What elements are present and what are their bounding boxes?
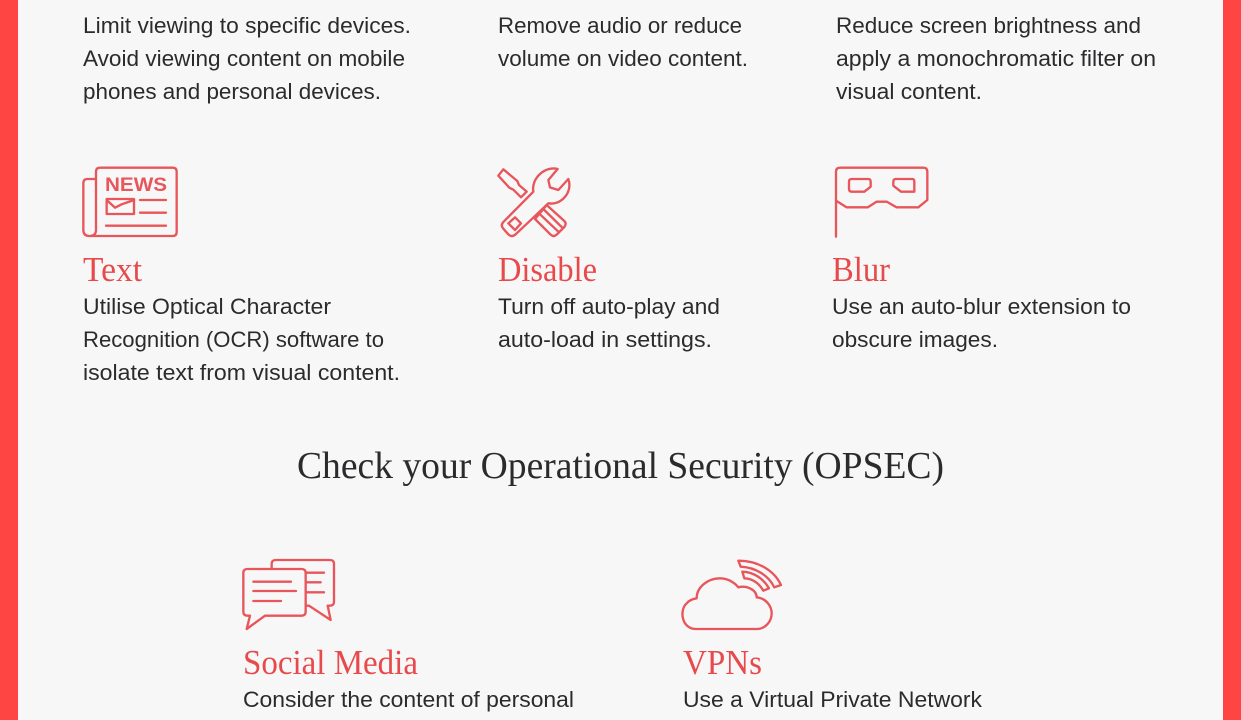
text: blur description: [832, 294, 1131, 352]
text: text description: [83, 294, 400, 385]
heading: blur: Blur: [832, 250, 890, 289]
icon: newspaper: [83, 168, 177, 236]
text: audio description: Remove audio or reduce: [498, 13, 742, 38]
panel: vpns tip: [682, 561, 983, 712]
heading: disable: Disable: [498, 250, 597, 289]
text: disable description: [498, 294, 720, 352]
text: devices description: phones and personal devices.: [83, 79, 381, 104]
panel: disable tip: [498, 168, 720, 352]
heading: vpns: VPNs: [683, 643, 762, 682]
text: visual description: Reduce screen brightness and: [836, 13, 1141, 38]
icon: newspaper: NEWS: [105, 175, 167, 196]
text: blur description: Use an auto-blur extension to: [832, 294, 1131, 319]
text: audio description: volume on video content.: [498, 46, 748, 71]
text: disable description: Turn off auto-play and: [498, 294, 720, 319]
panel: audio tip: [498, 0, 748, 71]
panel: visual tip: [836, 0, 1156, 104]
text: visual description: apply a monochromatic filter on: [836, 46, 1156, 71]
right red border: [1223, 0, 1241, 720]
text: social media description: Consider the content of personal: [243, 687, 574, 712]
text: visual description: [836, 13, 1156, 104]
icon: wrench and screwdriver: [498, 168, 569, 236]
text: vpns description: Use a Virtual Private Network: [683, 687, 983, 712]
heading: text: Text: [83, 250, 142, 289]
section title: Check your Operational Security (OPSEC): [297, 445, 944, 487]
panel: social media tip: [243, 560, 574, 712]
text: text description: isolate text from visual content.: [83, 360, 400, 385]
text: devices description: Limit viewing to specific devices.: [83, 13, 411, 38]
text: audio description: [498, 13, 748, 71]
icon: eye mask on stick: [836, 168, 927, 237]
text: visual description: visual content.: [836, 79, 982, 104]
heading: social media: Social Media: [243, 643, 418, 682]
icon: speech bubbles: [243, 560, 334, 629]
panel: devices tip: [83, 0, 411, 104]
text: text description: Recognition (OCR) software to: [83, 327, 384, 352]
text: devices description: [83, 13, 411, 104]
text: blur description: obscure images.: [832, 327, 998, 352]
icon: cloud with signal: [682, 561, 781, 629]
left red border: [0, 0, 18, 720]
text: disable description: auto-load in settings.: [498, 327, 712, 352]
panel: blur tip: [832, 168, 1131, 352]
text: devices description: Avoid viewing content on mobile: [83, 46, 405, 71]
text: text description: Utilise Optical Character: [83, 294, 331, 319]
panel: text tip: [83, 168, 400, 385]
